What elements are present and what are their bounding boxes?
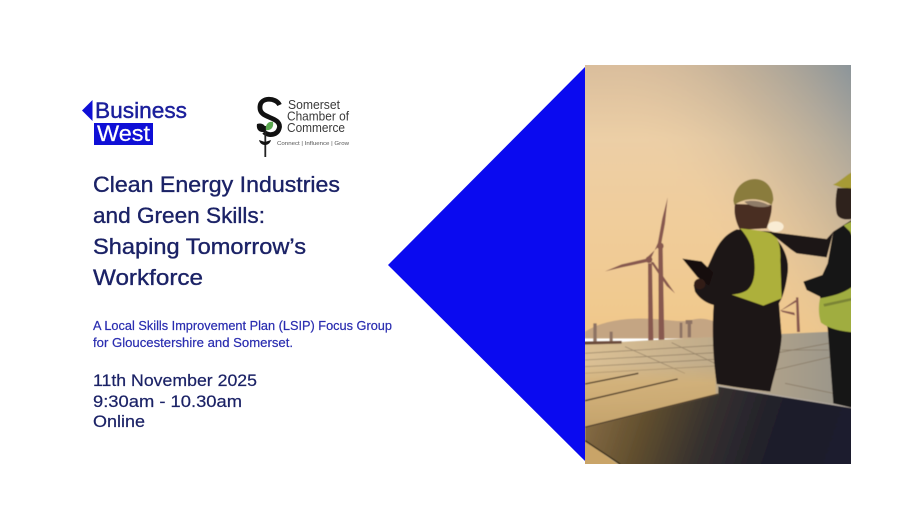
subtitle: A Local Skills Improvement Plan (LSIP) Focus Group	[93, 319, 392, 333]
glare	[768, 221, 784, 232]
hand	[694, 279, 705, 289]
title: Workforce	[93, 265, 203, 290]
logo: Somerset Chamber of Commerce	[257, 97, 349, 157]
logo word: Business: Business	[95, 98, 187, 123]
event details: Online	[93, 412, 145, 431]
subtitle: for Gloucestershire and Somerset.	[93, 336, 293, 350]
lower vest	[819, 285, 854, 332]
logo: Business West	[82, 98, 187, 146]
photo: workers and wind turbines at sunset	[582, 62, 854, 467]
torso, arm and legs	[694, 229, 788, 392]
wind turbines	[605, 197, 800, 341]
corner panel	[585, 440, 618, 464]
logo text: Somerset	[288, 97, 340, 112]
subtitle	[93, 319, 392, 350]
worker right	[768, 171, 854, 408]
hat brim shadow	[744, 201, 770, 207]
head and hair	[735, 204, 772, 230]
distant hills	[585, 318, 718, 338]
solar panel grid lines	[585, 343, 833, 393]
event details	[93, 371, 257, 431]
logo text: Commerce	[287, 120, 345, 135]
tablet	[682, 259, 713, 285]
helmet	[833, 172, 851, 190]
title: and Green Skills:	[93, 203, 265, 228]
body and legs	[803, 218, 854, 408]
near solar panels	[585, 368, 716, 428]
sky	[582, 62, 854, 338]
logo text: Connect | Influence | Grow	[277, 141, 349, 147]
vest stripe	[823, 297, 854, 307]
icon: left-pointing arrow	[82, 100, 92, 121]
logo block: West: West	[97, 121, 150, 146]
icon: S with plant	[257, 99, 280, 157]
title	[93, 172, 340, 290]
logo text	[277, 97, 349, 147]
logo text: Chamber of	[287, 108, 349, 124]
event details: 9:30am - 10.30am	[93, 392, 242, 411]
upper vest	[844, 221, 851, 236]
solar field	[582, 331, 854, 467]
horizon strip	[582, 341, 622, 345]
solar panel dark seams	[585, 373, 718, 427]
event details: 11th November 2025	[93, 371, 257, 390]
distant structures	[593, 320, 692, 342]
worker left	[682, 179, 788, 392]
blue triangle	[388, 67, 585, 461]
arm	[768, 232, 833, 257]
helmet	[733, 179, 773, 205]
title: Shaping Tomorrow’s	[93, 234, 306, 259]
head and beard	[836, 188, 854, 219]
foreground solar panel	[585, 386, 854, 467]
title: Clean Energy Industries	[93, 172, 340, 197]
safety vest	[732, 228, 782, 306]
